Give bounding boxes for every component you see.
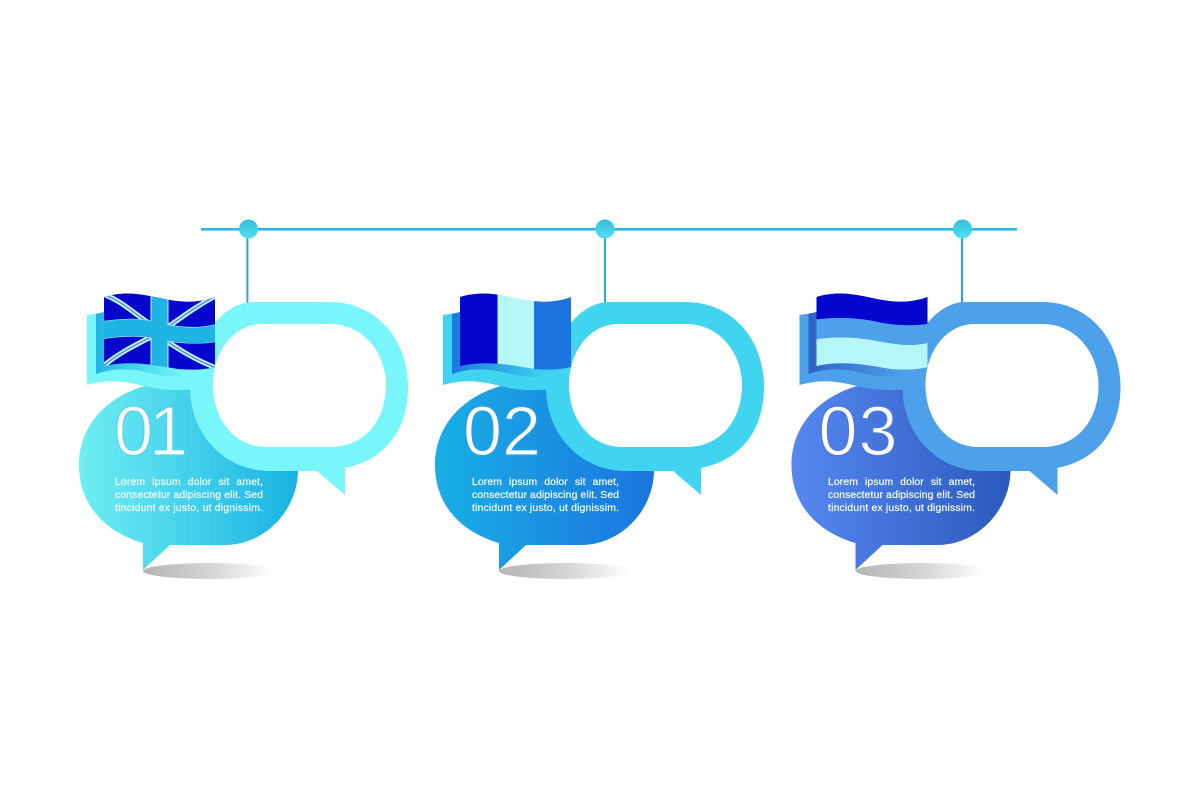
bubble window [926,324,1098,447]
flag: horizontal tricolour [816,294,928,370]
outline bubble [546,302,764,495]
ground shadow [499,563,631,579]
description: consectetur adipiscing elit. Sed [828,490,975,501]
panel: step 01 [79,285,408,579]
description: tincidunt ex justo, ut dignissim. [472,503,619,514]
timeline connector [201,220,1017,304]
panel: step 03 [792,285,1120,579]
description: consectetur adipiscing elit. Sed [472,490,619,501]
flag: union jack [104,294,215,370]
description: Lorem ipsum dolor sit amet, [828,477,975,488]
hanger: step 2 [604,229,606,304]
description: tincidunt ex justo, ut dignissim. [115,503,263,514]
horizontal line [201,228,1017,231]
flag: vertical tricolour [460,294,571,370]
ground shadow [856,563,988,579]
panel: step 02 [435,285,764,579]
description [828,477,975,514]
text bubble [792,380,1010,570]
description: Lorem ipsum dolor sit amet, [115,477,263,488]
flag ribbon shade [808,310,928,377]
description [115,477,263,514]
flag ribbon shade [452,310,571,377]
text bubble [435,380,654,570]
flag ribbon back [87,311,205,390]
description [472,477,619,514]
outline bubble [190,302,408,495]
number: 01 [114,392,188,470]
node: step 1 [239,220,258,238]
node: step 3 [953,220,972,238]
node: step 2 [596,220,614,238]
hanger: step 3 [961,229,963,304]
flag ribbon shade [96,310,215,377]
number: 02 [463,392,541,470]
description: tincidunt ex justo, ut dignissim. [828,503,975,514]
ground shadow [143,563,275,579]
flag ribbon back [800,311,918,390]
number: 03 [818,392,897,470]
flag ribbon back [443,311,561,390]
hanger: step 1 [246,229,248,304]
bubble window [213,324,386,447]
description: Lorem ipsum dolor sit amet, [472,477,619,488]
bubble window [569,324,742,447]
description: consectetur adipiscing elit. Sed [115,490,263,501]
text bubble [79,380,298,570]
outline bubble [902,302,1120,495]
